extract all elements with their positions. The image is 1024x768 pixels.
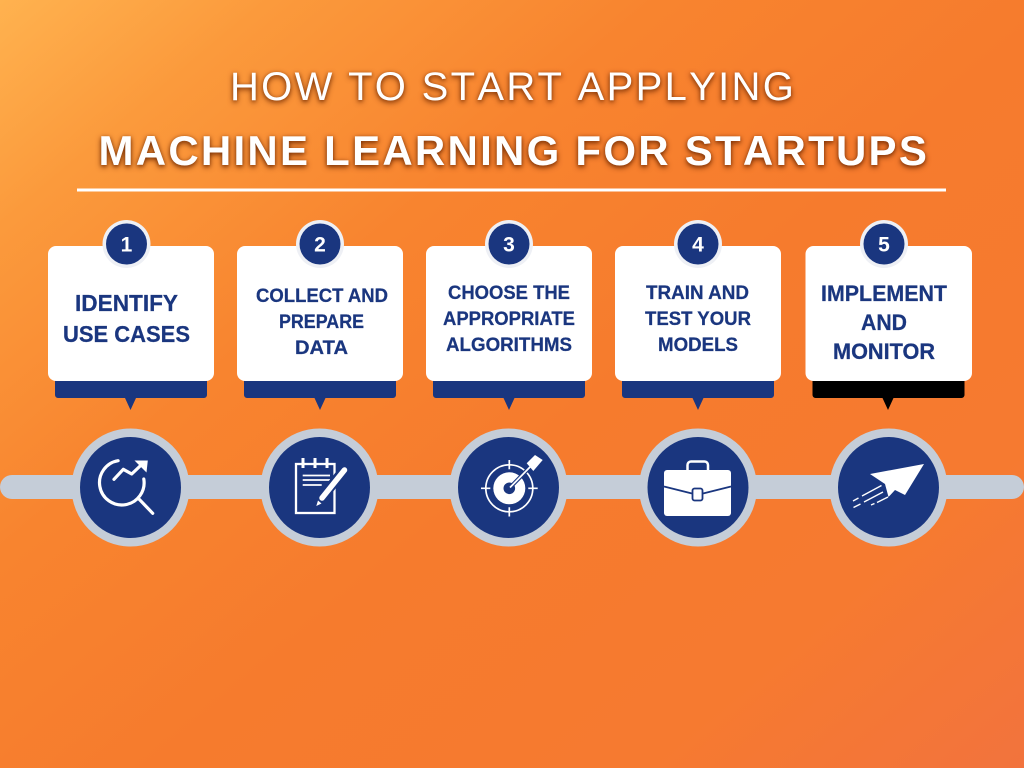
step 3 card base [433,375,585,410]
step 4 label: TEST YOUR [645,308,751,330]
step 1 badge [102,220,150,268]
step 2 label: COLLECT AND [256,285,388,307]
step 4 icon: briefcase [639,428,757,546]
step 3 [426,220,592,546]
step 1 label: IDENTIFY [75,290,178,316]
timeline bar [0,475,1024,499]
step 4 label: TRAIN AND [646,282,749,304]
step 2 label [256,285,388,359]
step 2 card [237,246,403,381]
step 5 icon: paper plane [830,428,948,546]
step 1 card [48,246,214,381]
step 2 card base [244,375,396,410]
step 1 badge: 1 [121,234,133,256]
title divider [77,188,946,192]
step 4 badge: 4 [692,234,704,256]
step 5 label [821,281,948,364]
step 5 badge [860,220,908,268]
title line 1: HOW TO START APPLYING [230,65,796,109]
step 3 card [426,246,592,381]
step 3 label: CHOOSE THE [448,282,570,304]
step 2 icon: notepad and pencil [260,428,378,546]
step 2 label: DATA [295,337,348,359]
step 4 card [615,246,781,381]
step 5 card [806,246,972,381]
step 4 badge [674,220,722,268]
step 2 label: PREPARE [279,311,364,333]
step 3 badge: 3 [503,234,515,256]
step 1 label [63,290,190,347]
step 5 badge: 5 [878,234,890,256]
step 3 icon: target and arrow [450,428,568,546]
step 1 card base [55,375,207,410]
step 4 label [645,282,751,356]
step 2 badge [296,220,344,268]
step 1 [48,220,214,546]
step 4 card base [622,375,774,410]
step 4 [615,220,781,546]
step 5 label: MONITOR [833,339,935,364]
step 5 label: IMPLEMENT [821,281,948,306]
step 4 label: MODELS [658,334,738,356]
step 3 label: ALGORITHMS [446,334,572,356]
step 3 badge [485,220,533,268]
step 5 card base [812,375,964,410]
step 3 label: APPROPRIATE [443,308,575,330]
title [97,65,929,174]
step 1 icon: magnifier with growth arrow [72,428,190,546]
step 2 badge: 2 [314,234,326,256]
step 5 label: AND [861,310,907,335]
step 1 label: USE CASES [63,321,190,347]
step 2 [237,220,403,546]
step 3 label [443,282,575,356]
step 5 [806,220,972,546]
title line 2: MACHINE LEARNING FOR STARTUPS [98,126,929,174]
